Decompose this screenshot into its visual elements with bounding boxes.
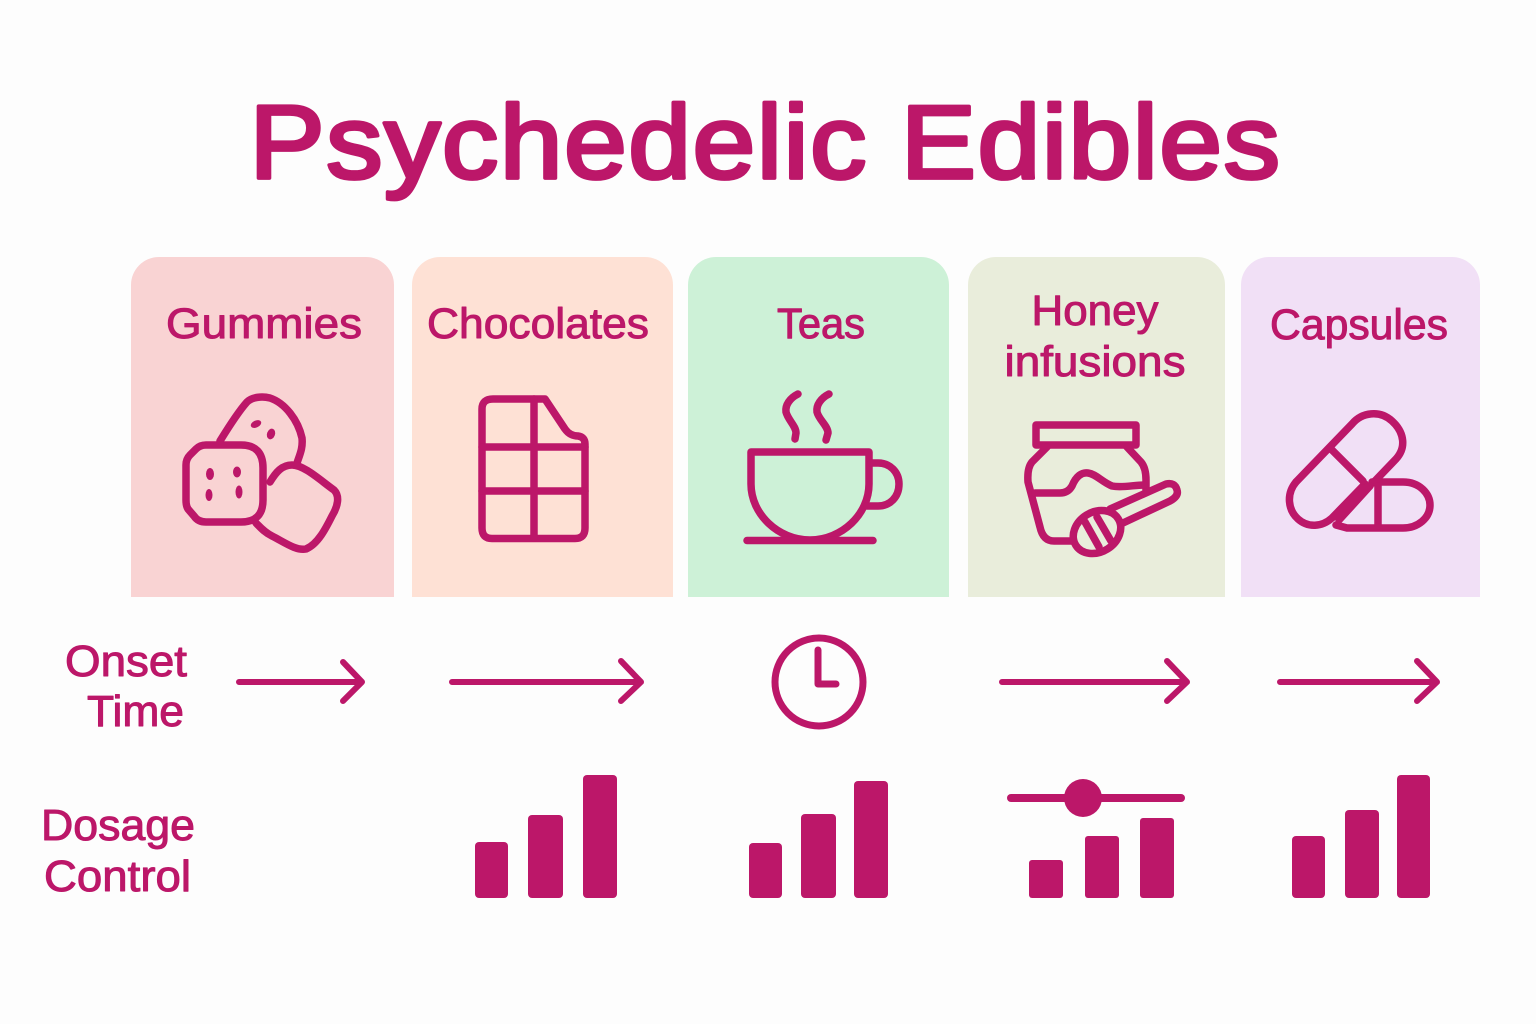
bar chart: chocolates dosage bbox=[475, 775, 617, 898]
arrow: chocolates onset bbox=[452, 661, 641, 701]
arrow: gummies onset bbox=[239, 662, 362, 701]
bar chart: capsules dosage bbox=[1292, 775, 1430, 898]
icon: gummies bbox=[186, 397, 338, 549]
heading: honey infusions: Honey bbox=[1032, 287, 1159, 335]
icon: chocolate bar bbox=[482, 399, 585, 538]
heading: honey infusions: infusions bbox=[1004, 338, 1186, 386]
panel: chocolates bbox=[412, 257, 673, 597]
panel: gummies bbox=[131, 257, 394, 597]
slider and bar chart: honey dosage bbox=[1007, 779, 1185, 898]
heading: honey infusions bbox=[1004, 287, 1186, 386]
arrow: capsules onset bbox=[1280, 661, 1437, 701]
heading: teas: Teas bbox=[777, 300, 865, 348]
icon: clock bbox=[775, 638, 863, 726]
heading: chocolates: Chocolates bbox=[427, 300, 649, 348]
row label: onset time: Onset bbox=[65, 637, 187, 686]
icon: capsules bbox=[1289, 414, 1430, 528]
arrow: honey onset bbox=[1002, 661, 1187, 701]
row label: onset time bbox=[65, 637, 187, 736]
heading: gummies: Gummies bbox=[166, 300, 362, 348]
row label: dosage control: Control bbox=[44, 852, 191, 901]
panel: honey infusions bbox=[968, 257, 1225, 597]
icon: honey jar bbox=[1028, 425, 1177, 562]
icon: tea cup bbox=[747, 394, 899, 540]
panel: teas bbox=[688, 257, 949, 597]
title: Psychedelic Edibles bbox=[250, 85, 1282, 201]
row label: dosage control bbox=[41, 801, 195, 901]
heading: capsules: Capsules bbox=[1270, 301, 1448, 349]
row label: dosage control: Dosage bbox=[41, 801, 195, 850]
panel: capsules bbox=[1241, 257, 1480, 597]
row label: onset time: Time bbox=[87, 687, 184, 736]
bar chart: teas dosage bbox=[749, 781, 888, 898]
